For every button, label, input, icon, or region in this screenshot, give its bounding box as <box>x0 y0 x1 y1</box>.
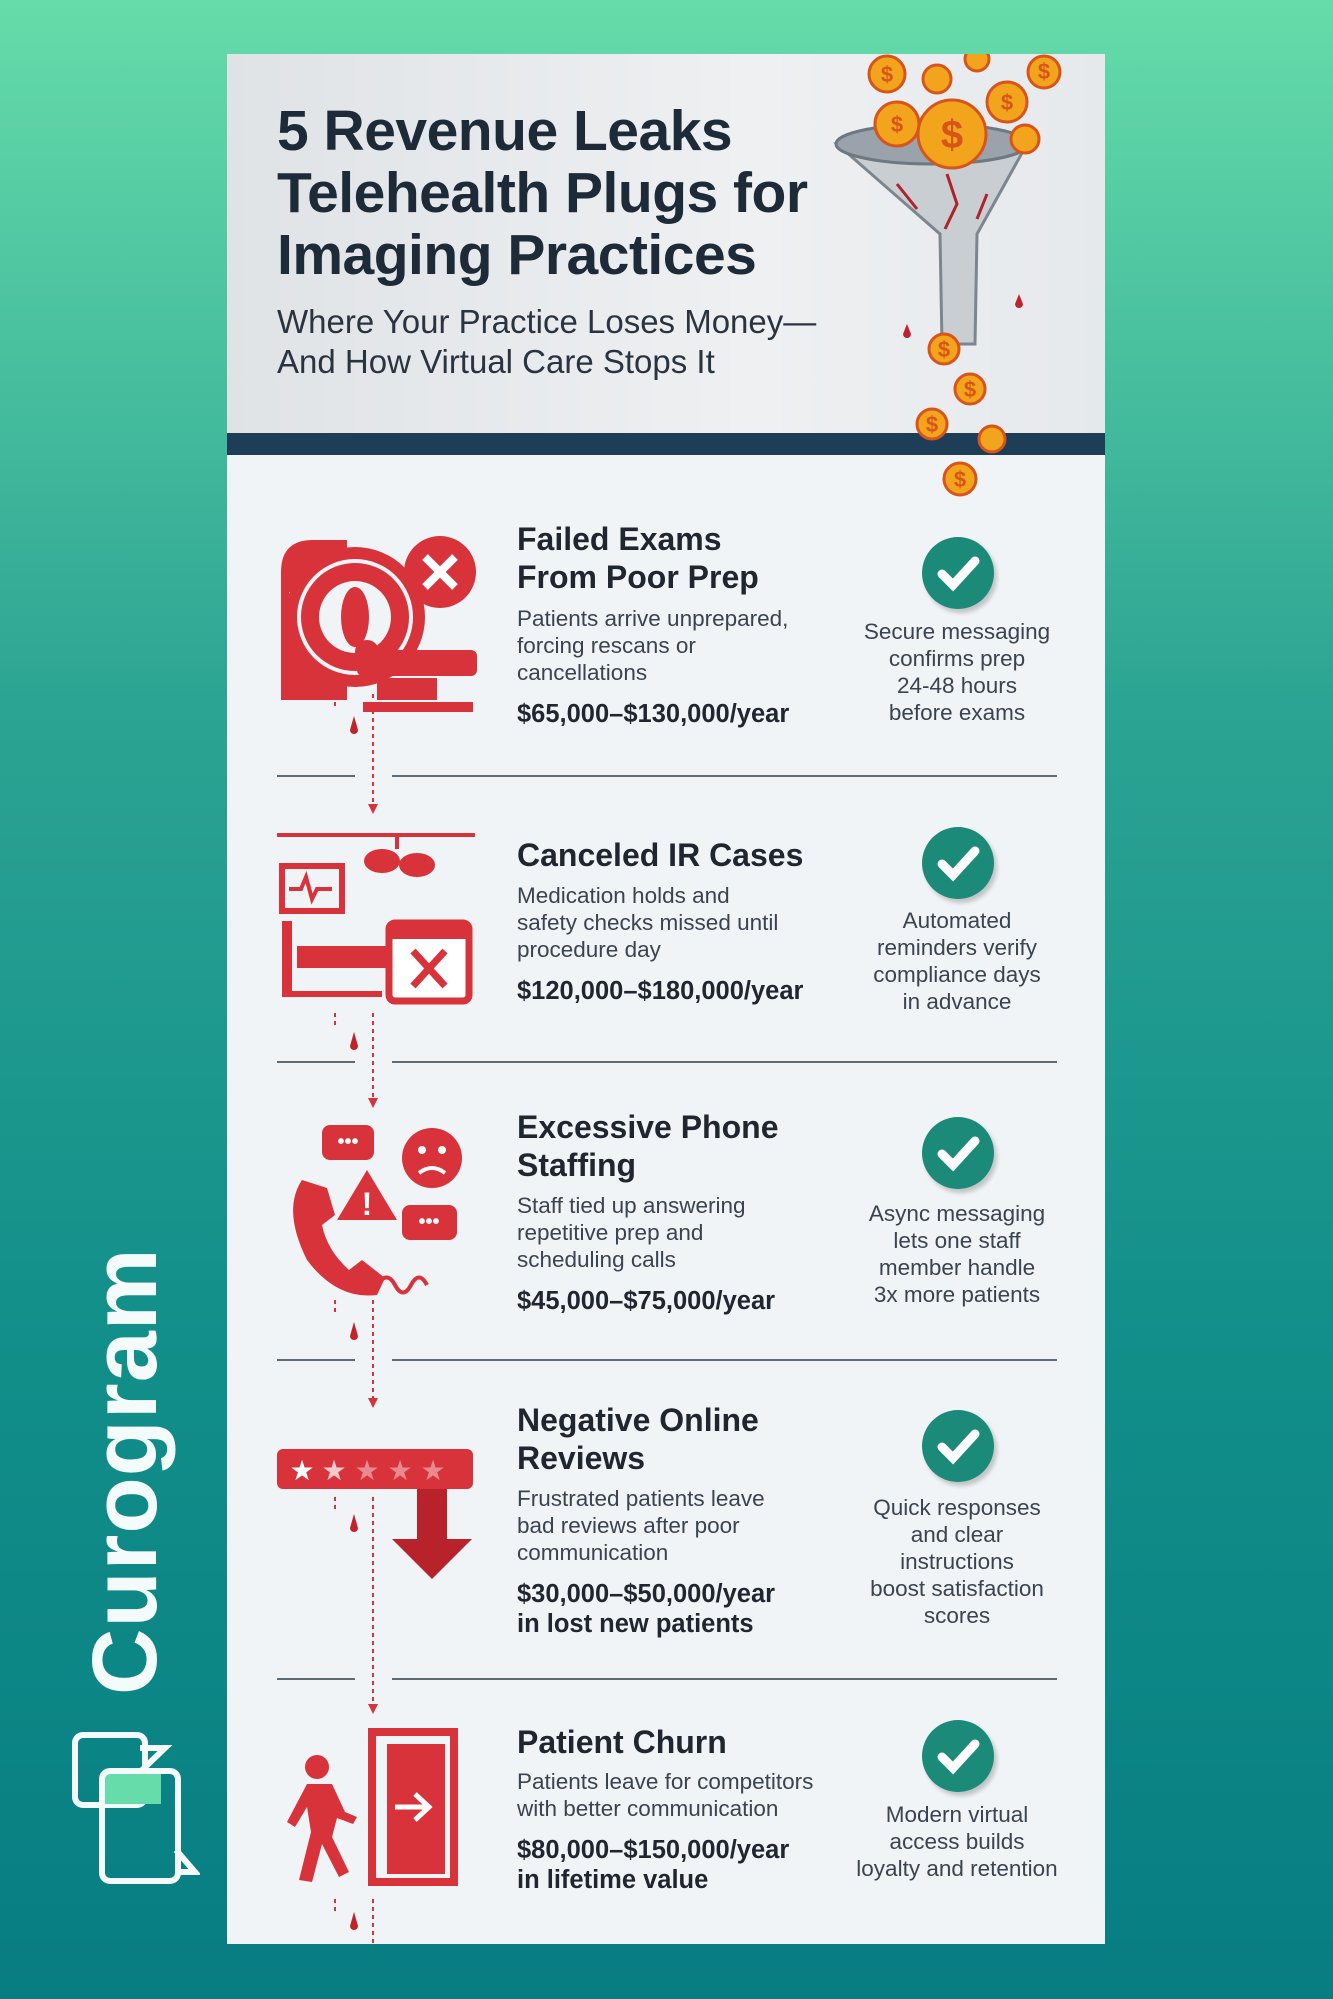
icon: leaking funnel with coins: $ <box>1038 59 1050 84</box>
heading: Patient Churn <box>517 1724 727 1760</box>
section 3: phone staffing <box>293 1109 1045 1315</box>
title: Telehealth Plugs for <box>277 161 808 225</box>
description: forcing rescans or <box>517 633 696 658</box>
solution text: Quick responses <box>873 1495 1041 1520</box>
price: in lost new patients <box>517 1610 754 1638</box>
heading: Failed Exams <box>517 521 722 557</box>
title: 5 Revenue Leaks <box>277 99 732 163</box>
icon: star rating with down arrow: ★ <box>289 1455 315 1486</box>
solution text: member handle <box>879 1255 1035 1280</box>
subtitle: Where Your Practice Loses Money— <box>277 303 816 340</box>
solution text: Automated <box>903 908 1011 933</box>
solution text: instructions <box>900 1549 1014 1574</box>
description: Patients leave for competitors <box>517 1769 813 1794</box>
solution text: 3x more patients <box>874 1282 1040 1307</box>
solution text: Secure messaging <box>864 619 1050 644</box>
description: Medication holds and <box>517 883 730 908</box>
solution text: 24-48 hours <box>897 673 1017 698</box>
solution text: scores <box>924 1603 990 1628</box>
solution text: compliance days <box>873 962 1041 987</box>
price: in lifetime value <box>517 1866 708 1894</box>
icon: leaking funnel with coins: $ <box>891 112 903 137</box>
description <box>517 883 778 962</box>
description <box>517 1193 745 1272</box>
description <box>517 606 788 685</box>
description: safety checks missed until <box>517 910 778 935</box>
price <box>517 1580 775 1638</box>
icon: leaking funnel with coins: $ <box>954 467 966 492</box>
card <box>227 54 1105 1944</box>
icon: leaking funnel with coins: $ <box>1001 90 1013 115</box>
icon: person exiting door <box>287 1728 458 1886</box>
heading: Reviews <box>517 1440 645 1476</box>
icon: star rating with down arrow <box>277 1449 473 1579</box>
icon: star rating with down arrow: ★ <box>387 1455 413 1486</box>
solution text <box>856 1802 1058 1881</box>
heading <box>517 1109 778 1183</box>
check icon <box>922 537 994 609</box>
description <box>517 1769 813 1821</box>
price: $65,000–$130,000/year <box>517 700 789 728</box>
brand: Curogram vertical wordmark: Curogram <box>74 1247 176 1695</box>
title <box>277 99 808 287</box>
solution text <box>864 619 1050 725</box>
solution text: Async messaging <box>869 1201 1045 1226</box>
check icon <box>922 1410 994 1482</box>
icon: leaking funnel with coins <box>833 54 1062 496</box>
section 4: negative reviews <box>277 1402 1044 1638</box>
price <box>517 1836 789 1894</box>
heading: Negative Online <box>517 1402 759 1438</box>
icon: leaking funnel with coins: $ <box>881 62 893 87</box>
description: procedure day <box>517 937 661 962</box>
description: communication <box>517 1540 668 1565</box>
heading <box>517 1402 759 1476</box>
heading <box>517 521 759 595</box>
description: Staff tied up answering <box>517 1193 745 1218</box>
arrows: dashed leak arrows and drops <box>334 694 378 1943</box>
icon: IR room with calendar <box>277 833 475 1004</box>
icon: star rating with down arrow: ★ <box>354 1455 380 1486</box>
subtitle <box>277 303 816 380</box>
description: bad reviews after poor <box>517 1513 740 1538</box>
heading: From Poor Prep <box>517 559 759 595</box>
description: scheduling calls <box>517 1247 676 1272</box>
solution text: boost satisfaction <box>870 1576 1044 1601</box>
solution text <box>869 1201 1045 1307</box>
heading: Staffing <box>517 1147 636 1183</box>
solution text: confirms prep <box>889 646 1025 671</box>
solution text: reminders verify <box>877 935 1037 960</box>
description: Patients arrive unprepared, <box>517 606 788 631</box>
solution text: lets one staff <box>893 1228 1021 1253</box>
section 1: failed exams <box>281 521 1050 728</box>
check icon <box>922 827 994 899</box>
price: $30,000–$50,000/year <box>517 1580 775 1608</box>
solution text: loyalty and retention <box>856 1856 1058 1881</box>
subtitle: And How Virtual Care Stops It <box>277 343 715 380</box>
brand: logo bubbles <box>72 1732 200 1884</box>
icon: MRI scanner with X <box>281 536 477 712</box>
section 2: canceled IR <box>277 827 1041 1014</box>
section 5: patient churn <box>287 1720 1058 1894</box>
price: $120,000–$180,000/year <box>517 977 803 1005</box>
solution text: and clear <box>911 1522 1003 1547</box>
icon: phone with chat bubbles: ••• <box>337 1131 359 1153</box>
solution text: access builds <box>889 1829 1025 1854</box>
solution text: before exams <box>889 700 1025 725</box>
icon: star rating with down arrow: ★ <box>321 1455 347 1486</box>
solution text: in advance <box>903 989 1011 1014</box>
heading: Canceled IR Cases <box>517 837 803 873</box>
check icon <box>922 1720 994 1792</box>
check icon <box>922 1117 994 1189</box>
price: $45,000–$75,000/year <box>517 1287 775 1315</box>
solution text <box>873 908 1041 1014</box>
solution text: Modern virtual <box>886 1802 1028 1827</box>
description: Frustrated patients leave <box>517 1486 765 1511</box>
solution text <box>870 1495 1044 1628</box>
header panel <box>227 54 1105 433</box>
description: cancellations <box>517 660 647 685</box>
description: with better communication <box>517 1796 778 1821</box>
icon: phone with chat bubbles <box>293 1125 462 1296</box>
description: repetitive prep and <box>517 1220 703 1245</box>
icon: phone with chat bubbles: ! <box>362 1186 372 1222</box>
icon: leaking funnel with coins: $ <box>964 377 976 402</box>
icon: leaking funnel with coins: $ <box>941 113 963 157</box>
icon: star rating with down arrow: ★ <box>420 1455 446 1486</box>
icon: leaking funnel with coins: $ <box>926 412 938 437</box>
price: $80,000–$150,000/year <box>517 1836 789 1864</box>
heading: Excessive Phone <box>517 1109 778 1145</box>
description <box>517 1486 765 1565</box>
title: Imaging Practices <box>277 223 756 287</box>
icon: leaking funnel with coins: $ <box>938 337 950 362</box>
icon: phone with chat bubbles: ••• <box>418 1211 440 1233</box>
